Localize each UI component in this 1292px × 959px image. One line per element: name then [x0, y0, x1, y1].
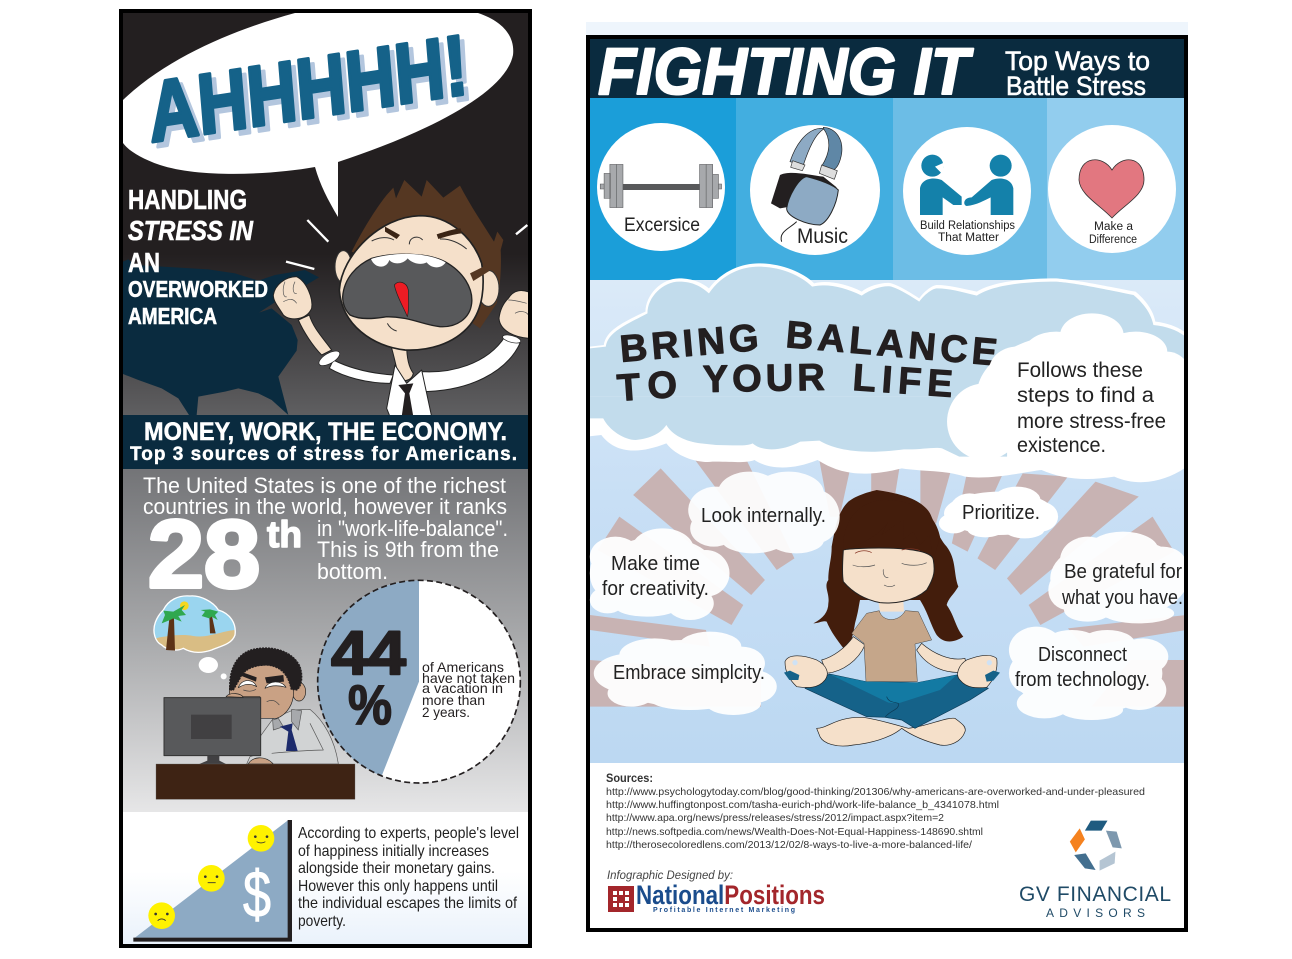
icon row backgrounds	[590, 98, 1184, 280]
callout: be grateful: Be grateful for	[1064, 561, 1182, 583]
header band: Battle Stress	[1006, 71, 1146, 101]
text block: according to experts	[298, 825, 519, 930]
heading: bring balance to your life: YOUR	[702, 357, 825, 401]
pie chart: 44 percent: a vacation in	[422, 680, 503, 696]
cloud: follow these steps	[947, 313, 1191, 462]
credit: National Positions logo: Profitable Internet Marketing	[653, 907, 795, 914]
heading: bring balance to your life: TO	[616, 364, 678, 410]
sources list: http://www.psychologytoday.com/blog/good-thinking/201306/why-americans-are-overworked-and-under-pleasured	[606, 786, 1145, 798]
banner: top 3 sources of stress: Top 3 sources of stress for Americans.	[130, 444, 517, 465]
callout: prioritize: Prioritize.	[962, 502, 1040, 524]
header band: Top Ways to	[1005, 46, 1150, 76]
heading: bring balance to your life	[616, 314, 999, 410]
icon: dollar sign: $	[243, 857, 271, 931]
banner: top 3 sources of stress: MONEY, WORK, THE ECONOMY.	[144, 418, 507, 446]
callout: look internally: Look internally.	[701, 505, 826, 527]
icon: music headphones: Music	[797, 225, 848, 248]
heading: bring balance to your life: LIFE	[851, 357, 954, 406]
heading: bring balance to your life: BRING	[618, 317, 760, 371]
text block: according to experts: the individual escapes the limits of	[298, 895, 518, 912]
text block: according to experts: poverty.	[298, 913, 346, 930]
text block: richest countries: This is 9th from the	[317, 537, 499, 562]
sources list: http://www.apa.org/news/press/releases/stress/2012/impact.aspx?item=2	[606, 812, 944, 824]
cloud: follow these steps: more stress-free	[1017, 410, 1166, 433]
pie chart: 44 percent: of Americans	[422, 659, 504, 675]
sources list: http://www.huffingtonpost.com/tasha-eurich-phd/work-life-balance_b_4341078.html	[606, 799, 999, 811]
title: handling stress in an overworked America: AN	[128, 247, 160, 278]
logo: GV Financial Advisors	[1019, 821, 1171, 920]
text block: according to experts: According to experts, people's level	[298, 825, 519, 842]
illustration: screaming man	[273, 180, 532, 417]
panel: handling stress	[119, 9, 532, 948]
credit: National Positions logo	[607, 868, 825, 914]
title: handling stress in an overworked America: HANDLING	[128, 184, 247, 215]
pie chart: 44 percent: 2 years.	[422, 704, 470, 720]
title: handling stress in an overworked America: AMERICA	[128, 303, 217, 329]
banner: top 3 sources of stress	[123, 415, 528, 469]
callout: disconnect from technology: Disconnect	[1038, 644, 1127, 666]
sources list: http://news.softpedia.com/news/Wealth-Does-Not-Equal-Happiness-148690.shtml	[606, 826, 983, 838]
sources list: http://therosecoloredlens.com/2013/12/02/8-ways-to-live-a-more-balanced-life/	[606, 839, 972, 851]
logo: GV Financial Advisors: ADVISORS	[1046, 906, 1145, 920]
cloud: follow these steps: existence.	[1017, 434, 1106, 457]
icon: heart make a difference	[1048, 125, 1176, 253]
cloud: follow these steps: steps to find a	[1017, 384, 1154, 407]
pie chart: 44 percent	[317, 580, 520, 783]
credit: National Positions logo: NationalPositions	[636, 880, 825, 910]
cloud: follow these steps: Follows these	[1017, 359, 1143, 382]
icon: music headphones	[750, 125, 880, 255]
callout: embrace simplicity	[594, 632, 777, 715]
icon: build relationships: That Matter	[938, 232, 999, 244]
icon: build relationships	[903, 127, 1031, 255]
callout: be grateful: what you have.	[1061, 587, 1183, 609]
chart: happiness rising with money	[133, 820, 292, 942]
callout: be grateful	[1048, 532, 1188, 623]
callout: make time for creativity: for creativity.	[602, 578, 709, 600]
heading: AHHHHH: AHHHHH!	[150, 22, 476, 166]
icon: heart make a difference: Make a	[1094, 221, 1134, 233]
sun rays	[590, 453, 1186, 707]
map: United States silhouette	[123, 259, 319, 415]
text block: richest countries: in "work-life-balance".	[317, 516, 508, 541]
text block: richest countries: countries in the world, however it ranks	[143, 494, 507, 519]
title: handling stress in an overworked America: OVERWORKED	[128, 276, 268, 302]
text block: according to experts: of happiness initially increases	[298, 843, 489, 860]
heading: bring balance to your life: BALANCE	[784, 314, 999, 374]
credit: National Positions logo: Infographic Designed by:	[607, 868, 733, 882]
header band: FIGHTING IT	[598, 34, 973, 108]
callout: disconnect from technology	[1009, 627, 1168, 720]
callout: embrace simplicity: Embrace simplcity.	[613, 662, 765, 684]
illustration: meditating woman	[784, 490, 1000, 746]
header band	[590, 34, 1184, 108]
sky background	[590, 280, 1184, 763]
icon: build relationships: Build Relationships	[920, 220, 1015, 232]
panel: fighting it	[586, 22, 1191, 932]
icon: exercise barbell: Excersice	[624, 215, 700, 236]
cloud: bring balance	[586, 263, 1191, 482]
logo: GV Financial Advisors: GV FINANCIAL	[1019, 883, 1171, 906]
callout: make time for creativity	[590, 528, 730, 620]
text block: richest countries: bottom.	[317, 559, 388, 584]
illustration: man at desk dreaming of a beach	[154, 596, 355, 799]
callout: disconnect from technology: from technology.	[1015, 669, 1150, 691]
callout: prioritize	[939, 487, 1058, 538]
pie chart: 44 percent: %	[348, 673, 392, 736]
text block: richest countries	[143, 473, 508, 584]
icon: heart make a difference: Difference	[1089, 234, 1137, 246]
pie chart: 44 percent: have not taken	[422, 670, 515, 686]
heading: AHHHHH: AHHHHH!	[145, 17, 471, 161]
pie chart: 44 percent: more than	[422, 692, 485, 708]
statistic: 28th: 28	[148, 501, 260, 608]
sources list: Sources:	[606, 771, 653, 785]
sources list	[606, 771, 1145, 851]
title: handling stress in an overworked America: STRESS IN	[128, 215, 254, 246]
pie chart: 44 percent: 44	[331, 619, 407, 688]
text block: richest countries: The United States is one of the richest	[143, 473, 507, 498]
statistic: 28th: th	[267, 514, 302, 555]
icon: exercise barbell	[597, 123, 725, 251]
statistic: 28th	[148, 501, 302, 608]
title: handling stress in an overworked America	[128, 184, 268, 329]
text block: according to experts: alongside their monetary gains.	[298, 860, 495, 877]
text block: according to experts: However this only happens until	[298, 878, 498, 895]
callout: make time for creativity: Make time	[611, 553, 700, 575]
speech bubble	[123, 13, 513, 217]
callout: look internally	[688, 472, 840, 553]
